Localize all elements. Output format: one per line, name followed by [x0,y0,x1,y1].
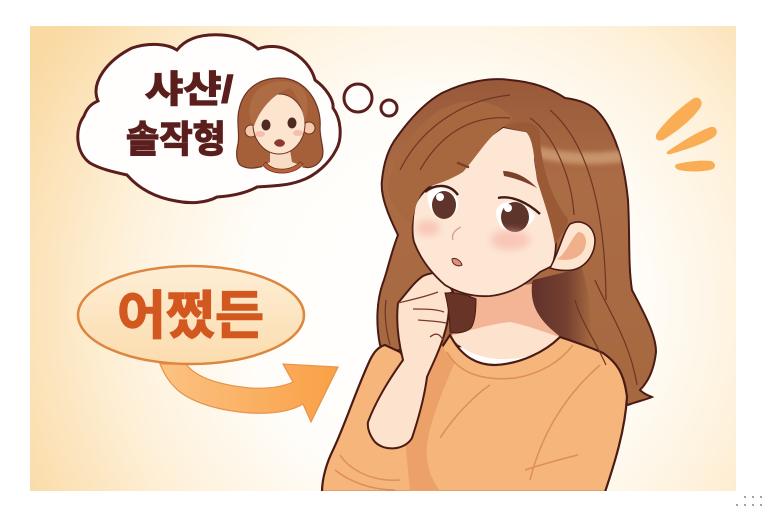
neck [450,284,562,359]
thought circle: large [344,84,372,112]
nose [452,227,461,240]
front hair right lock [503,122,568,245]
woman character [322,79,656,492]
icon: emphasis dashes [656,98,717,172]
bubble outline [78,35,340,203]
eyebrow left [458,163,468,167]
dark hair under chin [445,293,476,333]
mini portrait of the woman [237,78,323,173]
ear [550,222,595,270]
decorative marker dots [736,496,762,506]
eye left [425,186,458,219]
oval shape [78,266,304,364]
bubble text: line 1: 샤샨/ [145,69,233,110]
thought bubble [78,35,340,203]
mouth [452,258,462,266]
front hair left lock [412,101,512,225]
hair sheen [540,145,622,166]
sweater shadow [405,345,455,491]
neck light area [450,322,562,359]
sweater [322,335,627,492]
thought circle: small [381,100,397,116]
oval text: 어쩠든 [117,288,264,346]
back hair [377,79,656,405]
arrow [160,364,338,422]
eye right [496,197,540,232]
eyebrow right [503,171,537,188]
sweater collar rib and folds [335,345,600,490]
finger lines [398,292,446,340]
blush left [416,220,440,236]
hair strands [385,95,637,385]
blush right [490,230,530,250]
inner ear [557,232,586,260]
oval label [78,266,304,364]
arm and hand [368,273,453,448]
dark inner hair right [530,268,591,347]
bubble text: line 2: 솔작형 [126,119,226,160]
face [413,127,556,296]
